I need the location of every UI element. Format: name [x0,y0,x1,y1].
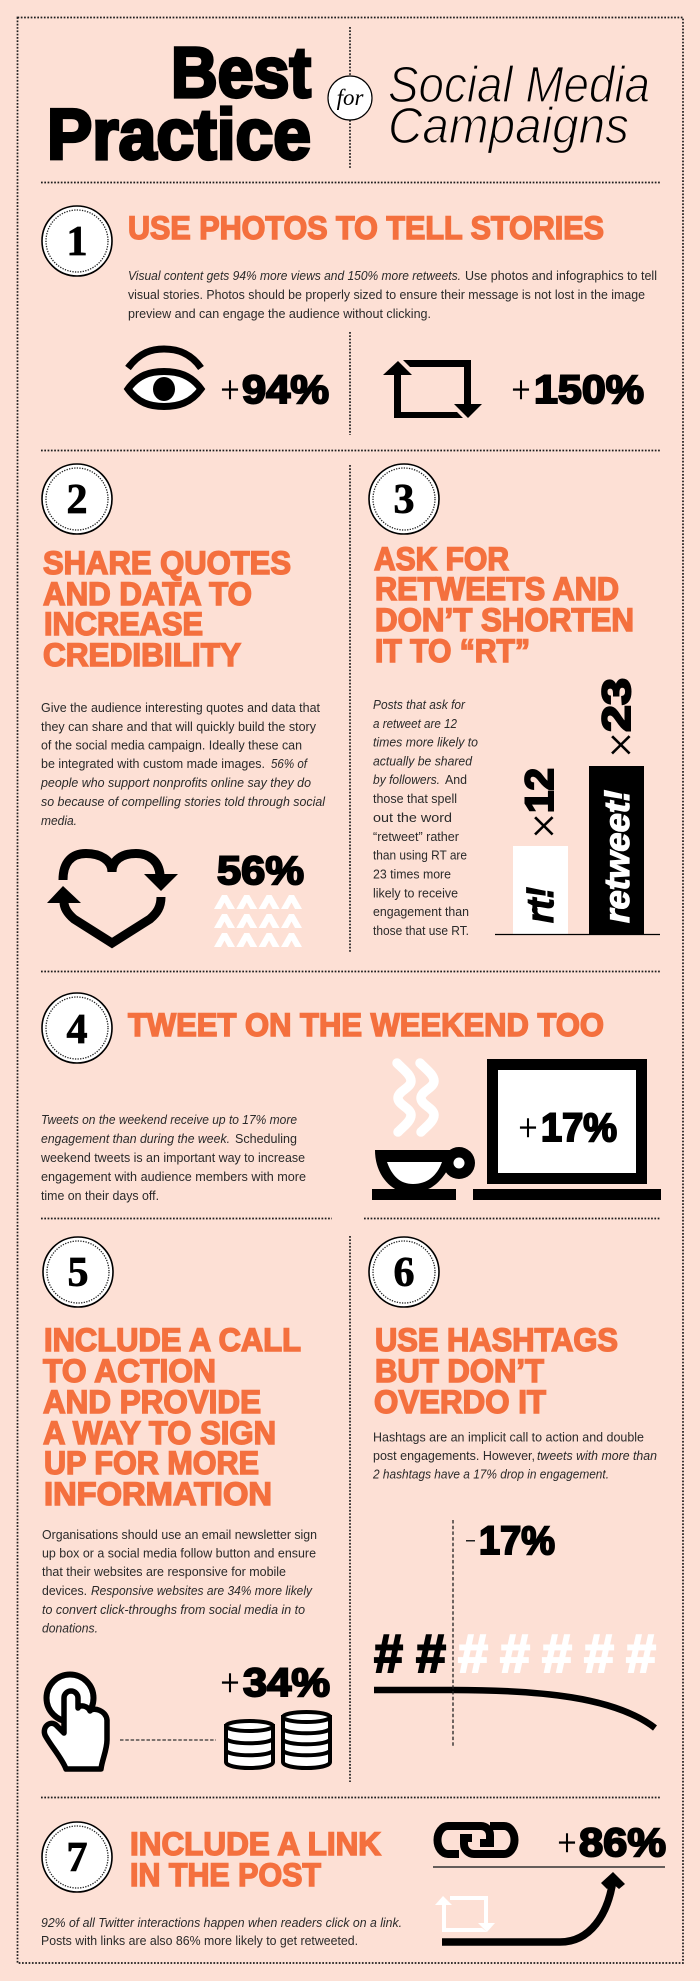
icon: heart arrows [47,854,178,943]
text block 1: Use photos and infographics to tell [465,268,657,283]
number badge 3 [369,464,439,534]
bar: retweet! x23 [589,678,646,934]
text block 4: weekend tweets is an important way to increase [40,1150,305,1165]
text block 2: they can share and that will quickly build the story [41,719,316,734]
heading 1: USE PHOTOS TO TELL STORIES [128,210,604,246]
stat +17%: + [518,1106,538,1150]
number badge 7 [42,1822,112,1892]
stat +94%: + [220,368,240,412]
icon: coffee cup [372,1147,475,1200]
icon: retweet [383,360,482,418]
icon: steam [397,1063,434,1132]
text block 2: 56% of [271,756,308,771]
number badge 1: 1 [66,219,88,265]
text block 4: engagement than during the week. [41,1131,230,1146]
heading: Social Media Campaigns [388,56,650,154]
icon: white retweet [435,1896,495,1932]
bar: retweet! x23: retweet! [598,790,637,923]
text block 5: devices. [42,1583,87,1598]
heading: Best Practice: Best [171,34,311,113]
text block 7: Posts with links are also 86% more likely to get retweeted. [41,1933,358,1948]
number badge 4 [42,993,112,1063]
heading 5 [43,1322,301,1512]
heading 7 [130,1826,381,1893]
text block 3: actually be shared [373,754,473,768]
heading 2: SHARE QUOTES [43,545,291,581]
text block 4: time on their days off. [41,1188,159,1203]
text block 5 [42,1527,317,1636]
panel: section 4 weekend [40,993,661,1203]
number badge 2: 2 [66,477,88,523]
white hashes: # [500,1624,530,1684]
stat 56%: 56% [217,849,304,893]
text block 5: up box or a social media follow button and ensure [42,1546,316,1560]
heading 3: DON’T SHORTEN [375,602,634,638]
heading: Social Media Campaigns: Campaigns [388,97,629,154]
icon: hand click [44,1674,107,1769]
number badge 5 [43,1237,113,1307]
number badge 4: 4 [66,1007,88,1053]
text block 2: of the social media campaign. Ideally these can [41,738,302,752]
white hashes: # [458,1624,488,1684]
text block 5: that their websites are responsive for mobile [42,1564,286,1579]
pictogram: chevrons [214,895,302,947]
text block 3: likely to receive [373,886,458,900]
black hashes [374,1624,446,1684]
panel: section 7 link [41,1821,666,1948]
text block 3: Posts that ask for [373,697,466,712]
text block 2: so because of compelling stories told through social [41,794,326,809]
black hashes: # [374,1624,403,1684]
text block 7: 92% of all Twitter interactions happen when readers click on a link. [41,1915,402,1930]
heading 5: INCLUDE A CALL [44,1322,301,1358]
number badge 3: 3 [394,477,414,523]
panel: section 5 call to action [42,1237,330,1769]
stat +86%: + [557,1821,577,1865]
text block 5: donations. [42,1620,98,1636]
text block 5: Organisations should use an email newsletter sign [42,1527,317,1542]
panel: section 3 retweets [369,464,660,938]
heading 4: TWEET ON THE WEEKEND TOO [128,1007,604,1043]
number badge 7: 7 [66,1835,88,1881]
heading 6 [374,1322,618,1420]
stat +34%: 34% [243,1661,330,1705]
white hashes: # [542,1624,572,1684]
heading 5: INFORMATION [44,1476,272,1512]
white hashes: # [584,1624,614,1684]
stat -17%: 17% [479,1519,555,1563]
stat +34%: + [220,1661,240,1705]
text block 3: a retweet are 12 [373,716,458,731]
icon: eye [128,349,201,406]
number badge 2 [42,464,112,534]
text block 3: “retweet” rather [373,829,460,844]
panel: section 2 quotes [40,464,326,947]
heading 7: IN THE POST [130,1857,321,1893]
bar: retweet! x23: × [595,732,646,758]
stat +86%: 86% [579,1821,666,1865]
number badge 6 [369,1237,439,1307]
heading 2: CREDIBILITY [43,637,241,673]
text block 1 [128,268,657,321]
title [47,34,650,175]
text block 3: those that spell [373,791,457,806]
heading 3: IT TO “RT” [375,633,530,669]
text block 2: be integrated with custom made images. [41,756,265,771]
heading 6: OVERDO IT [374,1384,546,1420]
text block 3: times more likely to [373,734,478,750]
number badge 5: 5 [68,1250,88,1296]
text block 4: Tweets on the weekend receive up to 17% more [41,1112,297,1127]
text block 1: visual stories. Photos should be properly sized to ensure their message is not lost in the image [128,287,645,302]
badge: for: for [337,85,364,110]
stat +94%: 94% [242,368,329,412]
text block 6: Hashtags are an implicit call to action and double [373,1430,644,1444]
text block 3: by followers. [373,772,440,787]
heading 6: BUT DON’T [375,1353,544,1389]
text block 3: out the word [373,810,452,825]
heading 5: AND PROVIDE [43,1384,261,1420]
text block 6 [372,1430,657,1482]
text block 1: preview and can engage the audience without clicking. [128,306,431,321]
text block 6: post engagements. However, [373,1448,535,1463]
heading 5: TO ACTION [43,1353,216,1389]
text block 3: those that use RT. [373,923,469,938]
text block 4: Scheduling [235,1131,297,1146]
heading: Best Practice: Practice [47,96,311,175]
text block 4 [40,1112,306,1203]
heading 3 [374,541,634,669]
text block 3: engagement than [373,904,469,919]
white hashes [458,1624,656,1684]
stat +17%: 17% [541,1106,617,1150]
panel: section 6 hashtags [369,1237,657,1747]
bar: rt! x12: 12 [518,768,562,813]
heading 2 [43,545,291,673]
text block 7 [41,1915,402,1948]
text block 3 [373,697,478,938]
bar: rt! x12: rt! [520,887,562,923]
stat +150%: 150% [534,368,644,412]
bar: rt! x12: × [518,813,569,839]
chart: hashtags engagement curve [374,1520,656,1747]
stat +150%: + [511,368,531,412]
heading: Social Media Campaigns: Social Media [388,56,650,113]
text block 1: Visual content gets 94% more views and 150% more retweets. [128,268,461,283]
heading 3: ASK FOR [374,541,509,577]
icon: coin stacks [226,1712,330,1768]
heading 5: A WAY TO SIGN [43,1415,276,1451]
heading 2: AND DATA TO [43,576,252,612]
text block 2: Give the audience interesting quotes and data that [41,700,320,715]
text block 5: to convert click-throughs from social media in to [42,1602,305,1617]
heading 2: INCREASE [44,606,203,642]
text block 6: 2 hashtags have a 17% drop in engagement. [372,1466,609,1482]
number badge 6: 6 [394,1250,414,1296]
dashed connector [120,1739,216,1741]
text block 6: tweets with more than [537,1448,657,1463]
text block 3: And [445,772,467,787]
text block 2: media. [41,813,77,828]
text block 2: people who support nonprofits online say they do [40,775,311,790]
text block 2 [40,700,326,828]
heading 7: INCLUDE A LINK [130,1826,381,1862]
arrow: rising curve [442,1872,625,1942]
heading 6: USE HASHTAGS [375,1322,618,1358]
white hashes: # [626,1624,656,1684]
bar: rt! x12 [513,768,569,934]
heading 5: UP FOR MORE [44,1445,259,1481]
text block 3: 23 times more [373,866,451,882]
icon: chain link [438,1826,514,1854]
panel: section 1 photos [42,206,657,418]
bar chart [495,678,660,934]
heading: Best Practice [47,34,311,175]
text block 4: engagement with audience members with more [41,1169,306,1184]
number badge 1 [42,206,112,276]
black hashes: # [416,1624,446,1684]
text block 3: than using RT are [373,848,467,862]
bar: retweet! x23: 23 [595,678,639,732]
badge: for [328,76,372,120]
text block 5: Responsive websites are 34% more likely [91,1583,313,1598]
heading 3: RETWEETS AND [375,571,619,607]
icon: laptop with stat [473,1059,661,1200]
